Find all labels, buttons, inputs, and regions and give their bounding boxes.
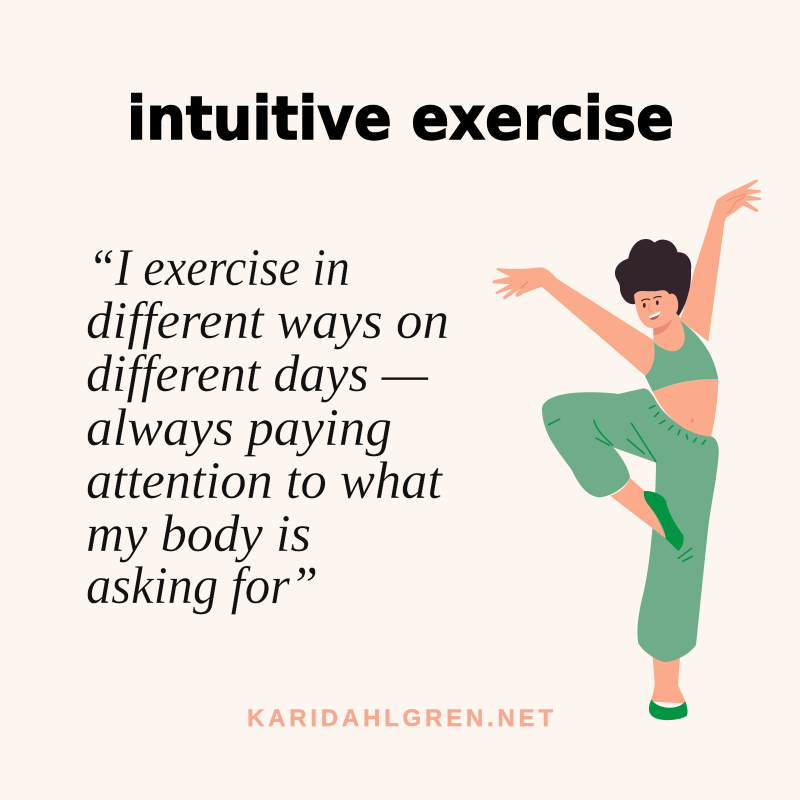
website footer: KARIDAHLGREN.NET	[247, 705, 553, 732]
neck shadow	[653, 318, 672, 335]
quote text: different days —	[86, 345, 429, 403]
shoe: standing foot	[649, 699, 688, 720]
bent calf	[610, 478, 667, 539]
belly	[653, 379, 718, 437]
quote text: always paying	[86, 399, 392, 457]
face	[634, 290, 678, 328]
right hand	[708, 180, 761, 225]
crop top	[645, 320, 718, 392]
neck and chest	[653, 313, 685, 352]
left raised arm	[542, 276, 655, 376]
quote text: “I exercise in	[88, 239, 350, 297]
quote text: asking for”	[86, 557, 318, 615]
standing leg and foot	[651, 657, 686, 703]
right raised arm	[680, 200, 737, 342]
trousers	[542, 388, 719, 662]
quote text: different ways on	[86, 292, 449, 350]
quote text: attention to what	[86, 452, 443, 510]
quote text	[86, 239, 449, 615]
trouser fold lines	[549, 406, 705, 561]
illustration: dancing woman	[492, 180, 761, 720]
hair	[615, 239, 691, 317]
upper body	[492, 180, 761, 437]
quote text: my body is	[86, 505, 311, 563]
lower body	[542, 388, 719, 720]
shoe: raised foot	[644, 491, 684, 551]
navel	[691, 419, 694, 423]
title: intuitive exercise	[127, 84, 674, 154]
left hand	[492, 267, 558, 299]
